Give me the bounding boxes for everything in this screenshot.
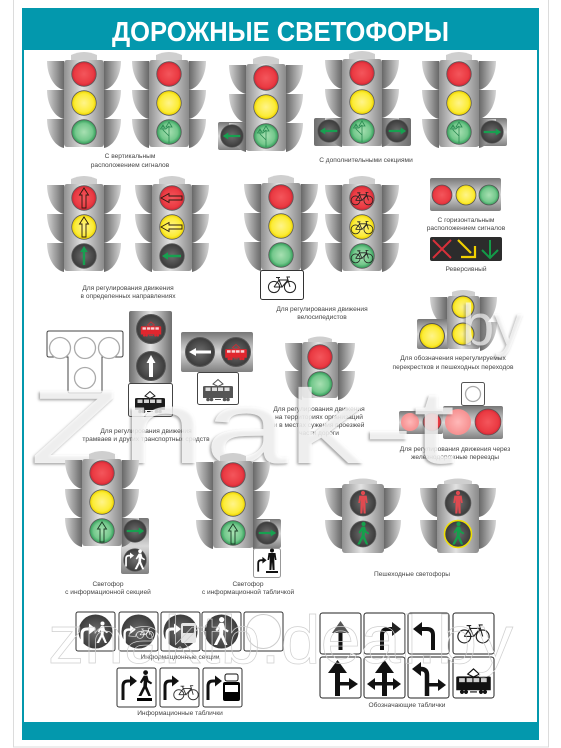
caption: info plate: Светофор bbox=[232, 581, 264, 588]
caption: cyclists: велосипедистов bbox=[297, 314, 347, 321]
caption: additional sections: С дополнительными секциями bbox=[319, 157, 413, 164]
plate: straight and right bbox=[320, 657, 361, 698]
traffic light: left arrows bbox=[135, 176, 209, 272]
plate: straight left and right bbox=[364, 657, 405, 698]
flashing yellow signal bbox=[417, 290, 497, 351]
plate: bus bbox=[203, 668, 242, 707]
caption: directions: в определенных направлениях bbox=[80, 293, 176, 300]
plate: bicycle bbox=[160, 668, 199, 707]
section: pedestrian bbox=[76, 612, 115, 651]
plate: tram bbox=[453, 657, 494, 698]
caption: railway: железнодорожные переезды bbox=[411, 454, 499, 461]
information plates bbox=[117, 668, 242, 707]
caption: organizations: на территориях организаций bbox=[275, 413, 363, 421]
caption: organizations: Для регулирования движения bbox=[273, 406, 365, 413]
outline diagram: tram light shape bbox=[47, 331, 123, 393]
watermark: large white lettering with soft shadow: Znak-t bbox=[30, 369, 455, 486]
traffic light: vertical plain bbox=[47, 52, 121, 148]
caption: vertical: С вертикальным bbox=[105, 153, 156, 160]
caption: organizations: части дороги bbox=[299, 430, 339, 437]
traffic light: horizontal bbox=[430, 178, 501, 211]
watermark: large white lettering with soft shadow bbox=[30, 293, 523, 486]
traffic light: two additional sections bbox=[314, 51, 411, 147]
watermark: large white lettering with soft shadow: by bbox=[462, 293, 523, 358]
section: person bbox=[202, 612, 241, 651]
tram light: vertical bbox=[128, 311, 172, 416]
caption: information sections: Информационные секции bbox=[141, 654, 220, 661]
plate: right bbox=[364, 613, 405, 654]
traffic light: left additional section bbox=[218, 56, 303, 152]
caption: tram: Для регулирования движения bbox=[100, 428, 192, 435]
caption: railway: Для регулирования движения через bbox=[400, 446, 510, 453]
section: bicycle bbox=[119, 612, 158, 651]
caption: pedestrian: Пешеходные светофоры bbox=[374, 571, 450, 578]
traffic light: vertical with arrow in green bbox=[132, 52, 206, 148]
caption: tram: трамваев и других транспортных средств bbox=[82, 436, 210, 443]
tram light: horizontal bbox=[181, 332, 253, 404]
caption: designation plates: Обозначающие таблички bbox=[369, 701, 446, 709]
traffic light: two sections bbox=[285, 336, 355, 400]
plate: left and right bbox=[408, 657, 449, 698]
plate: bicycle bbox=[453, 613, 494, 654]
railway crossing signal bbox=[399, 382, 503, 439]
caption: info plate: с информационной табличкой bbox=[202, 588, 295, 596]
caption: organizations: и в местах сужения проезжей bbox=[274, 421, 365, 429]
caption: reversible: Реверсивный bbox=[445, 265, 487, 273]
caption: info section: Светофор bbox=[92, 581, 124, 588]
caption: flashing: Для обозначения нерегулируемых bbox=[400, 354, 506, 362]
caption: cyclists: Для регулирования движения bbox=[276, 306, 368, 313]
section: blank bbox=[244, 612, 283, 651]
designation plates bbox=[320, 613, 494, 698]
information sections bbox=[76, 612, 283, 651]
caption: flashing: перекрестков и пешеходных переходов bbox=[393, 364, 514, 371]
section: bus bbox=[161, 612, 200, 651]
traffic light: right additional section bbox=[422, 52, 507, 148]
plate: pedestrian bbox=[117, 668, 156, 707]
caption: info section: с информационной секцией bbox=[65, 588, 151, 596]
traffic light: with bicycle sign bbox=[244, 175, 318, 300]
plate: straight bbox=[320, 613, 361, 654]
plate: left bbox=[408, 613, 449, 654]
pedestrian light bbox=[325, 478, 401, 553]
reversible signal bbox=[430, 237, 502, 261]
traffic light: up arrows bbox=[47, 176, 121, 272]
caption: directions: Для регулирования движения bbox=[82, 285, 174, 292]
traffic light: info section bbox=[65, 451, 149, 574]
title: ДОРОЖНЫЕ СВЕТОФОРЫ bbox=[112, 16, 449, 47]
caption: horizontal: расположением сигналов bbox=[427, 225, 506, 232]
pedestrian light with yellow ring bbox=[420, 478, 496, 553]
caption: horizontal: С горизонтальным bbox=[438, 217, 495, 224]
traffic light: bicycle lenses bbox=[325, 176, 399, 272]
watermark: outline site address: znaktb.deal.by bbox=[48, 602, 513, 678]
caption: information plates: Информационные таблички bbox=[137, 709, 223, 717]
caption: vertical: расположением сигналов bbox=[91, 162, 170, 169]
traffic light: info plate bbox=[196, 453, 281, 578]
